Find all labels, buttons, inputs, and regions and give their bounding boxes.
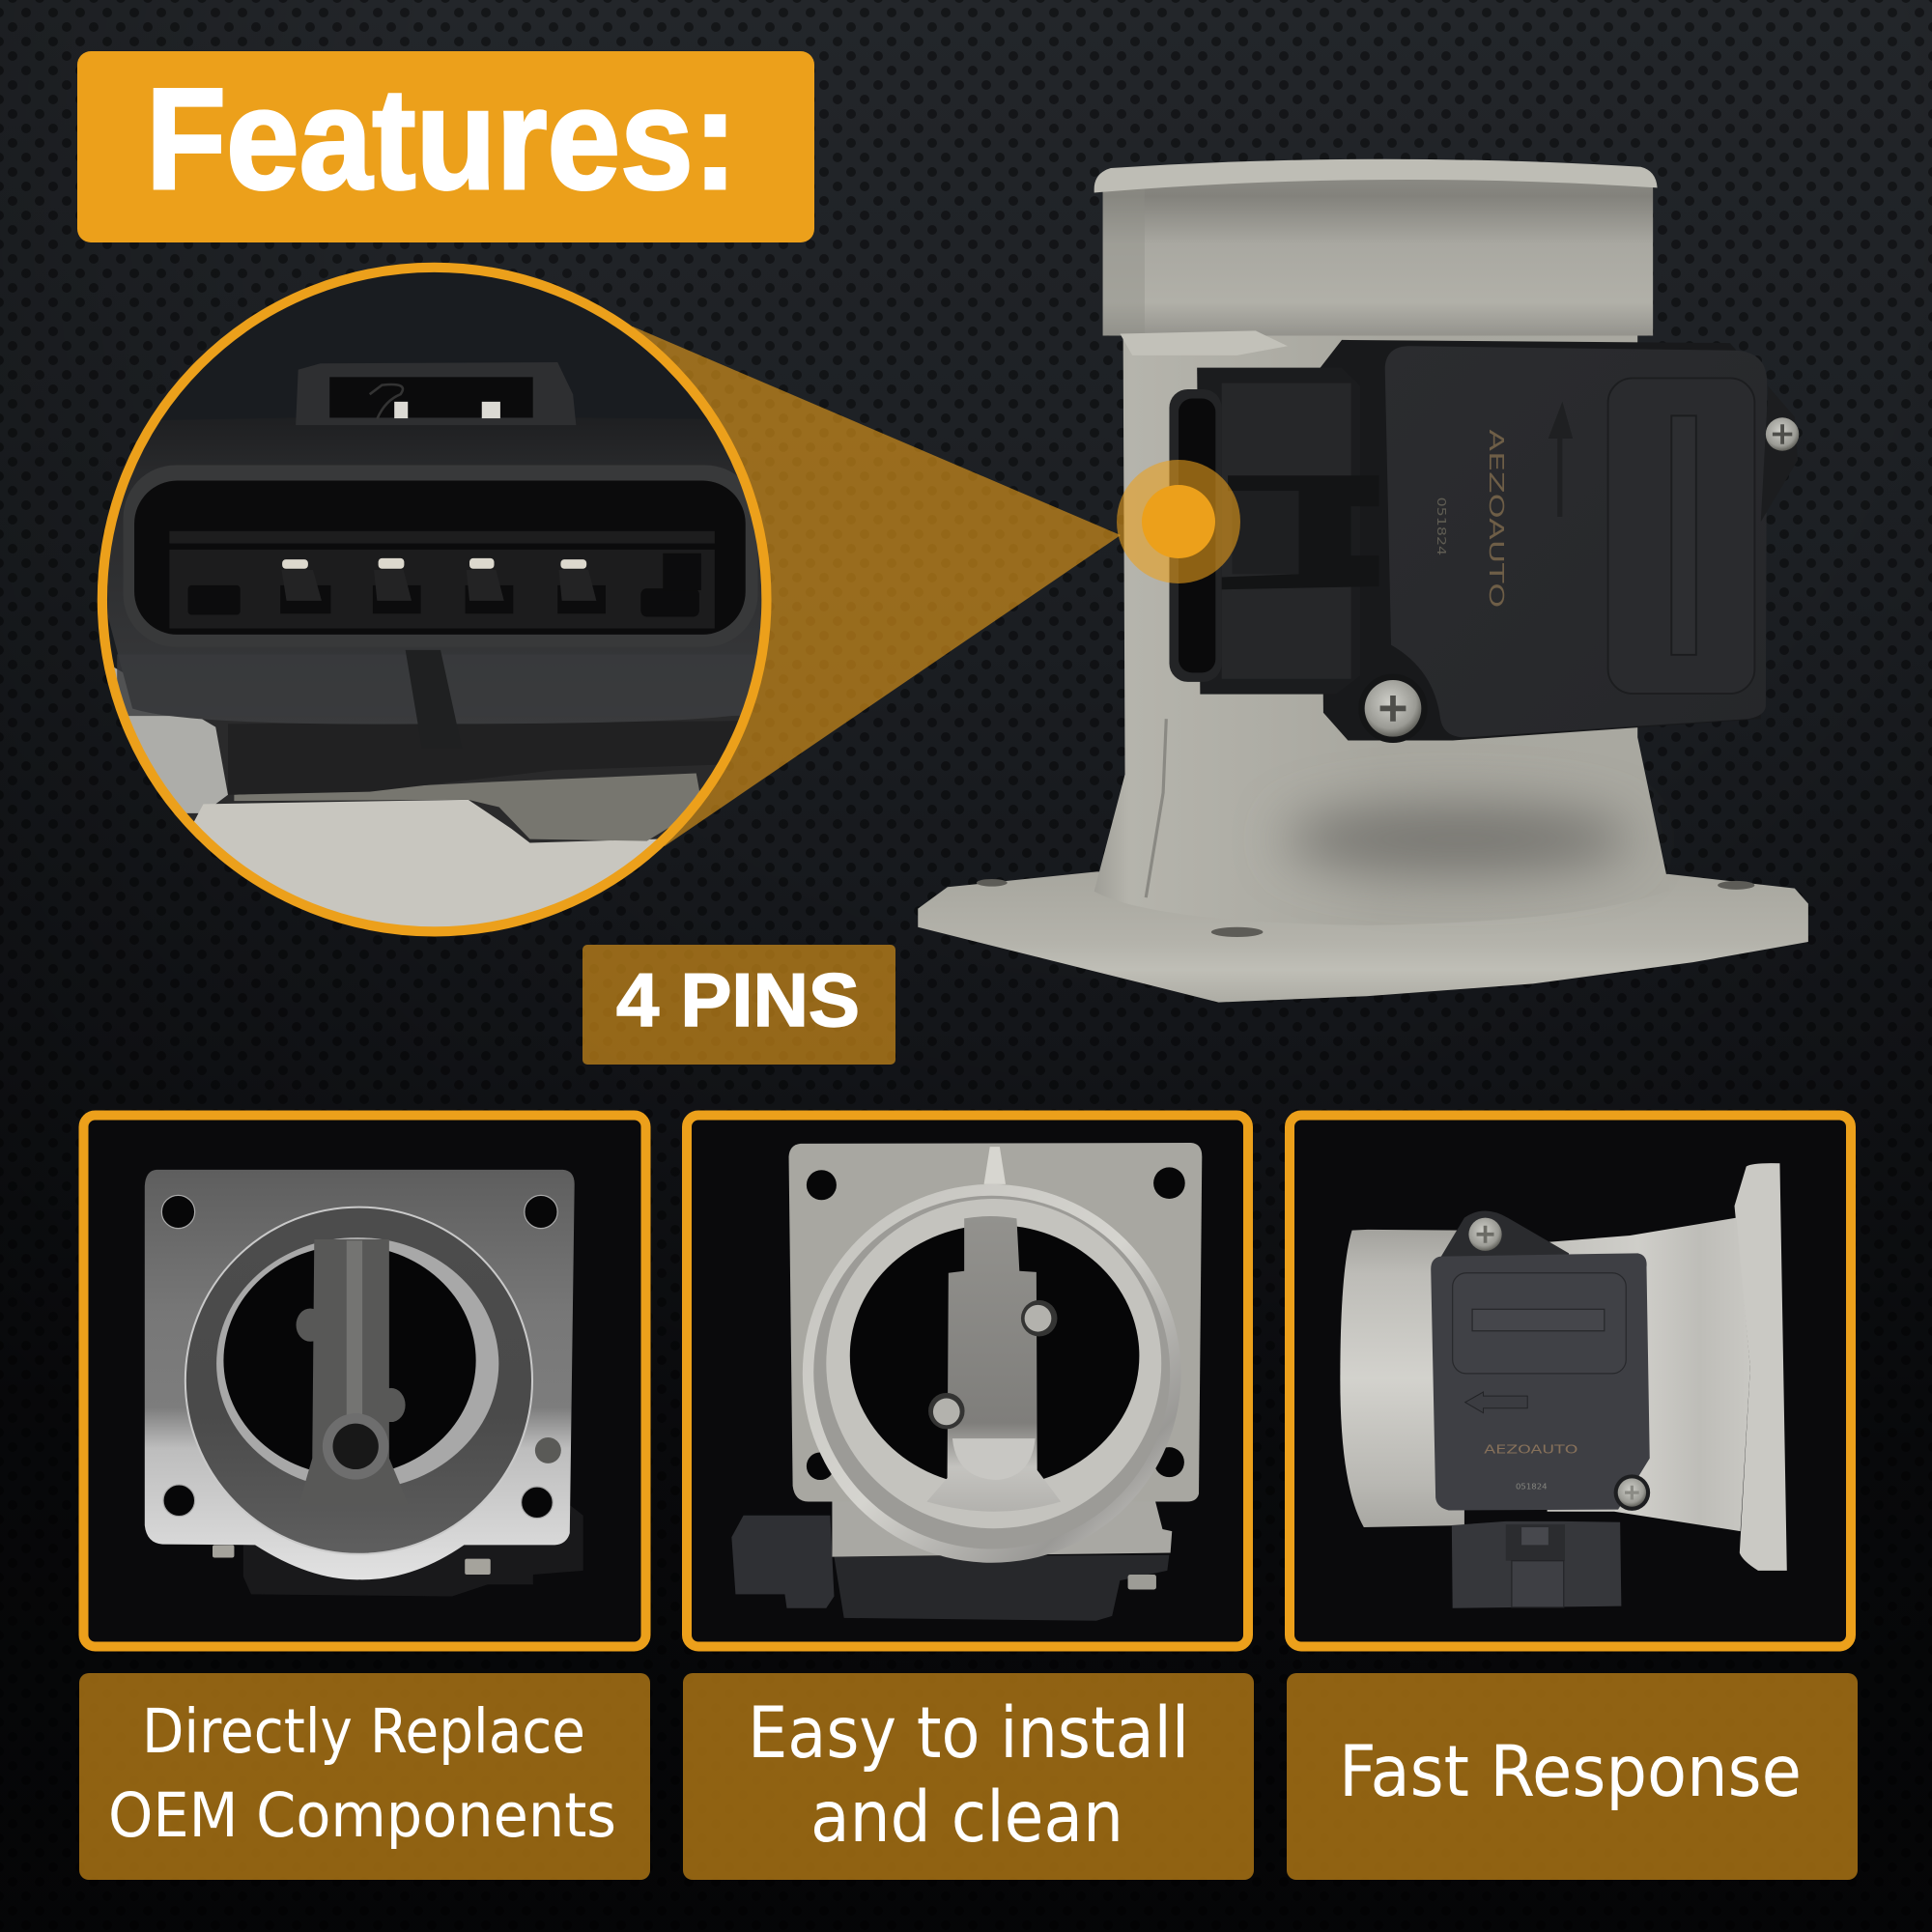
cover slot xyxy=(1671,415,1696,655)
caption text: Fast Response xyxy=(1339,1731,1802,1813)
features title box xyxy=(77,51,814,242)
neck and lower flare xyxy=(1094,334,1669,925)
product front view xyxy=(145,1170,583,1596)
part number: 051824 xyxy=(1516,1481,1548,1491)
strut xyxy=(298,1239,409,1506)
key ridge xyxy=(406,650,457,724)
product rear view xyxy=(731,1143,1202,1621)
plate holes xyxy=(807,1167,1185,1480)
magnified connector circle xyxy=(93,267,770,955)
index dimple xyxy=(535,1437,561,1463)
features title: Features: xyxy=(146,58,737,219)
product side view xyxy=(1340,1163,1787,1608)
plate xyxy=(789,1143,1202,1501)
top sprue xyxy=(984,1147,1006,1184)
lower screw xyxy=(928,1393,965,1429)
right tab and screw xyxy=(1761,386,1799,522)
orange ring xyxy=(102,268,766,931)
panel: fast response xyxy=(1290,1115,1851,1646)
shadow under connector xyxy=(228,721,752,795)
brand mark: AEZOAUTO xyxy=(1484,1443,1577,1457)
clip inner xyxy=(1233,491,1298,574)
connector xyxy=(1452,1521,1621,1608)
caption: easy to install xyxy=(683,1673,1254,1880)
4 pins text: 4 PINS xyxy=(616,957,860,1042)
caption: directly replace xyxy=(79,1673,650,1880)
bore xyxy=(850,1225,1139,1487)
connector xyxy=(731,1516,834,1608)
grey recess xyxy=(234,773,702,841)
top lip xyxy=(1094,159,1658,192)
connector clip xyxy=(1222,475,1378,589)
part number: 051824 xyxy=(1434,497,1448,555)
latch frame xyxy=(296,362,576,425)
strut plate xyxy=(926,1216,1061,1512)
mounting holes xyxy=(161,1195,557,1519)
pin tongues xyxy=(284,585,597,601)
callout cone xyxy=(531,327,1121,846)
latch slot xyxy=(1521,1527,1548,1545)
bolts xyxy=(213,1545,491,1575)
connector opening xyxy=(1179,399,1215,672)
pin bay xyxy=(169,550,715,629)
left casting xyxy=(111,666,228,813)
sensor behind flange xyxy=(243,1506,583,1596)
4 pins label xyxy=(582,945,895,1065)
inner ridge xyxy=(169,531,715,544)
inner bore highlight xyxy=(216,1237,498,1490)
pin slots xyxy=(188,554,701,616)
inlet cylinder xyxy=(1340,1230,1464,1527)
flange plate xyxy=(145,1170,575,1579)
bottom screw xyxy=(1614,1474,1650,1511)
sensor bead xyxy=(323,1413,388,1480)
pin highlights xyxy=(282,558,586,569)
latch window xyxy=(329,377,533,417)
sensor back plate xyxy=(1321,340,1767,741)
latch pins xyxy=(394,402,500,418)
outer rim xyxy=(803,1184,1181,1563)
panel: directly replace xyxy=(83,1115,645,1646)
connector block face xyxy=(1222,384,1351,679)
brand mark: AEZOAUTO xyxy=(1485,429,1508,608)
upper screw xyxy=(1021,1300,1057,1336)
opening rim xyxy=(124,466,757,595)
flange side xyxy=(1735,1163,1787,1571)
connector lower and top body xyxy=(107,417,764,724)
flange xyxy=(918,871,1808,1003)
slot xyxy=(1472,1309,1605,1331)
rim dark band xyxy=(813,1196,1170,1548)
connector opening xyxy=(134,480,746,635)
inner rim xyxy=(826,1199,1161,1528)
strut tip highlight xyxy=(952,1438,1036,1480)
main product: mass air flow sensor xyxy=(918,159,1808,1003)
neck edge shadow xyxy=(1146,719,1166,897)
flow arrow xyxy=(1548,402,1573,517)
top mount tab xyxy=(1440,1210,1569,1277)
caption: fast response xyxy=(1287,1673,1858,1880)
top cylinder xyxy=(1103,170,1653,335)
lower body highlight xyxy=(117,654,757,716)
neck collar xyxy=(1120,330,1288,355)
flare xyxy=(1548,1218,1750,1531)
lower collar xyxy=(832,1501,1172,1557)
strut tabs xyxy=(297,1308,406,1422)
callout target dot xyxy=(1117,460,1240,583)
panel: easy to install xyxy=(687,1115,1248,1646)
sensor cover xyxy=(1385,346,1767,737)
cylinder left band xyxy=(1103,189,1145,335)
top screw xyxy=(1468,1218,1502,1251)
flare shading xyxy=(1287,805,1632,873)
black housing xyxy=(834,1555,1169,1621)
caption line 2: and clean xyxy=(810,1776,1123,1859)
pale casting xyxy=(194,800,657,927)
latch wire xyxy=(370,384,403,419)
flow arrow xyxy=(1465,1392,1527,1413)
sensor body xyxy=(1431,1253,1650,1510)
connector latch xyxy=(1506,1524,1565,1561)
bolt xyxy=(1128,1575,1156,1590)
strut channel xyxy=(347,1240,362,1418)
caption line 1: Directly Replace xyxy=(142,1696,585,1767)
label recess xyxy=(1453,1273,1626,1374)
caption line 2: OEM Components xyxy=(108,1780,616,1851)
lower screw xyxy=(1358,674,1428,743)
throat xyxy=(185,1208,532,1554)
cover label recess xyxy=(1608,378,1754,694)
connector channel xyxy=(1512,1561,1564,1607)
connector mouth xyxy=(1169,389,1222,682)
bore opening xyxy=(223,1245,476,1476)
caption line 1: Easy to install xyxy=(748,1692,1189,1775)
aluminium surface xyxy=(187,716,740,842)
connector block xyxy=(1197,368,1360,695)
flange mounting holes xyxy=(977,879,1754,937)
